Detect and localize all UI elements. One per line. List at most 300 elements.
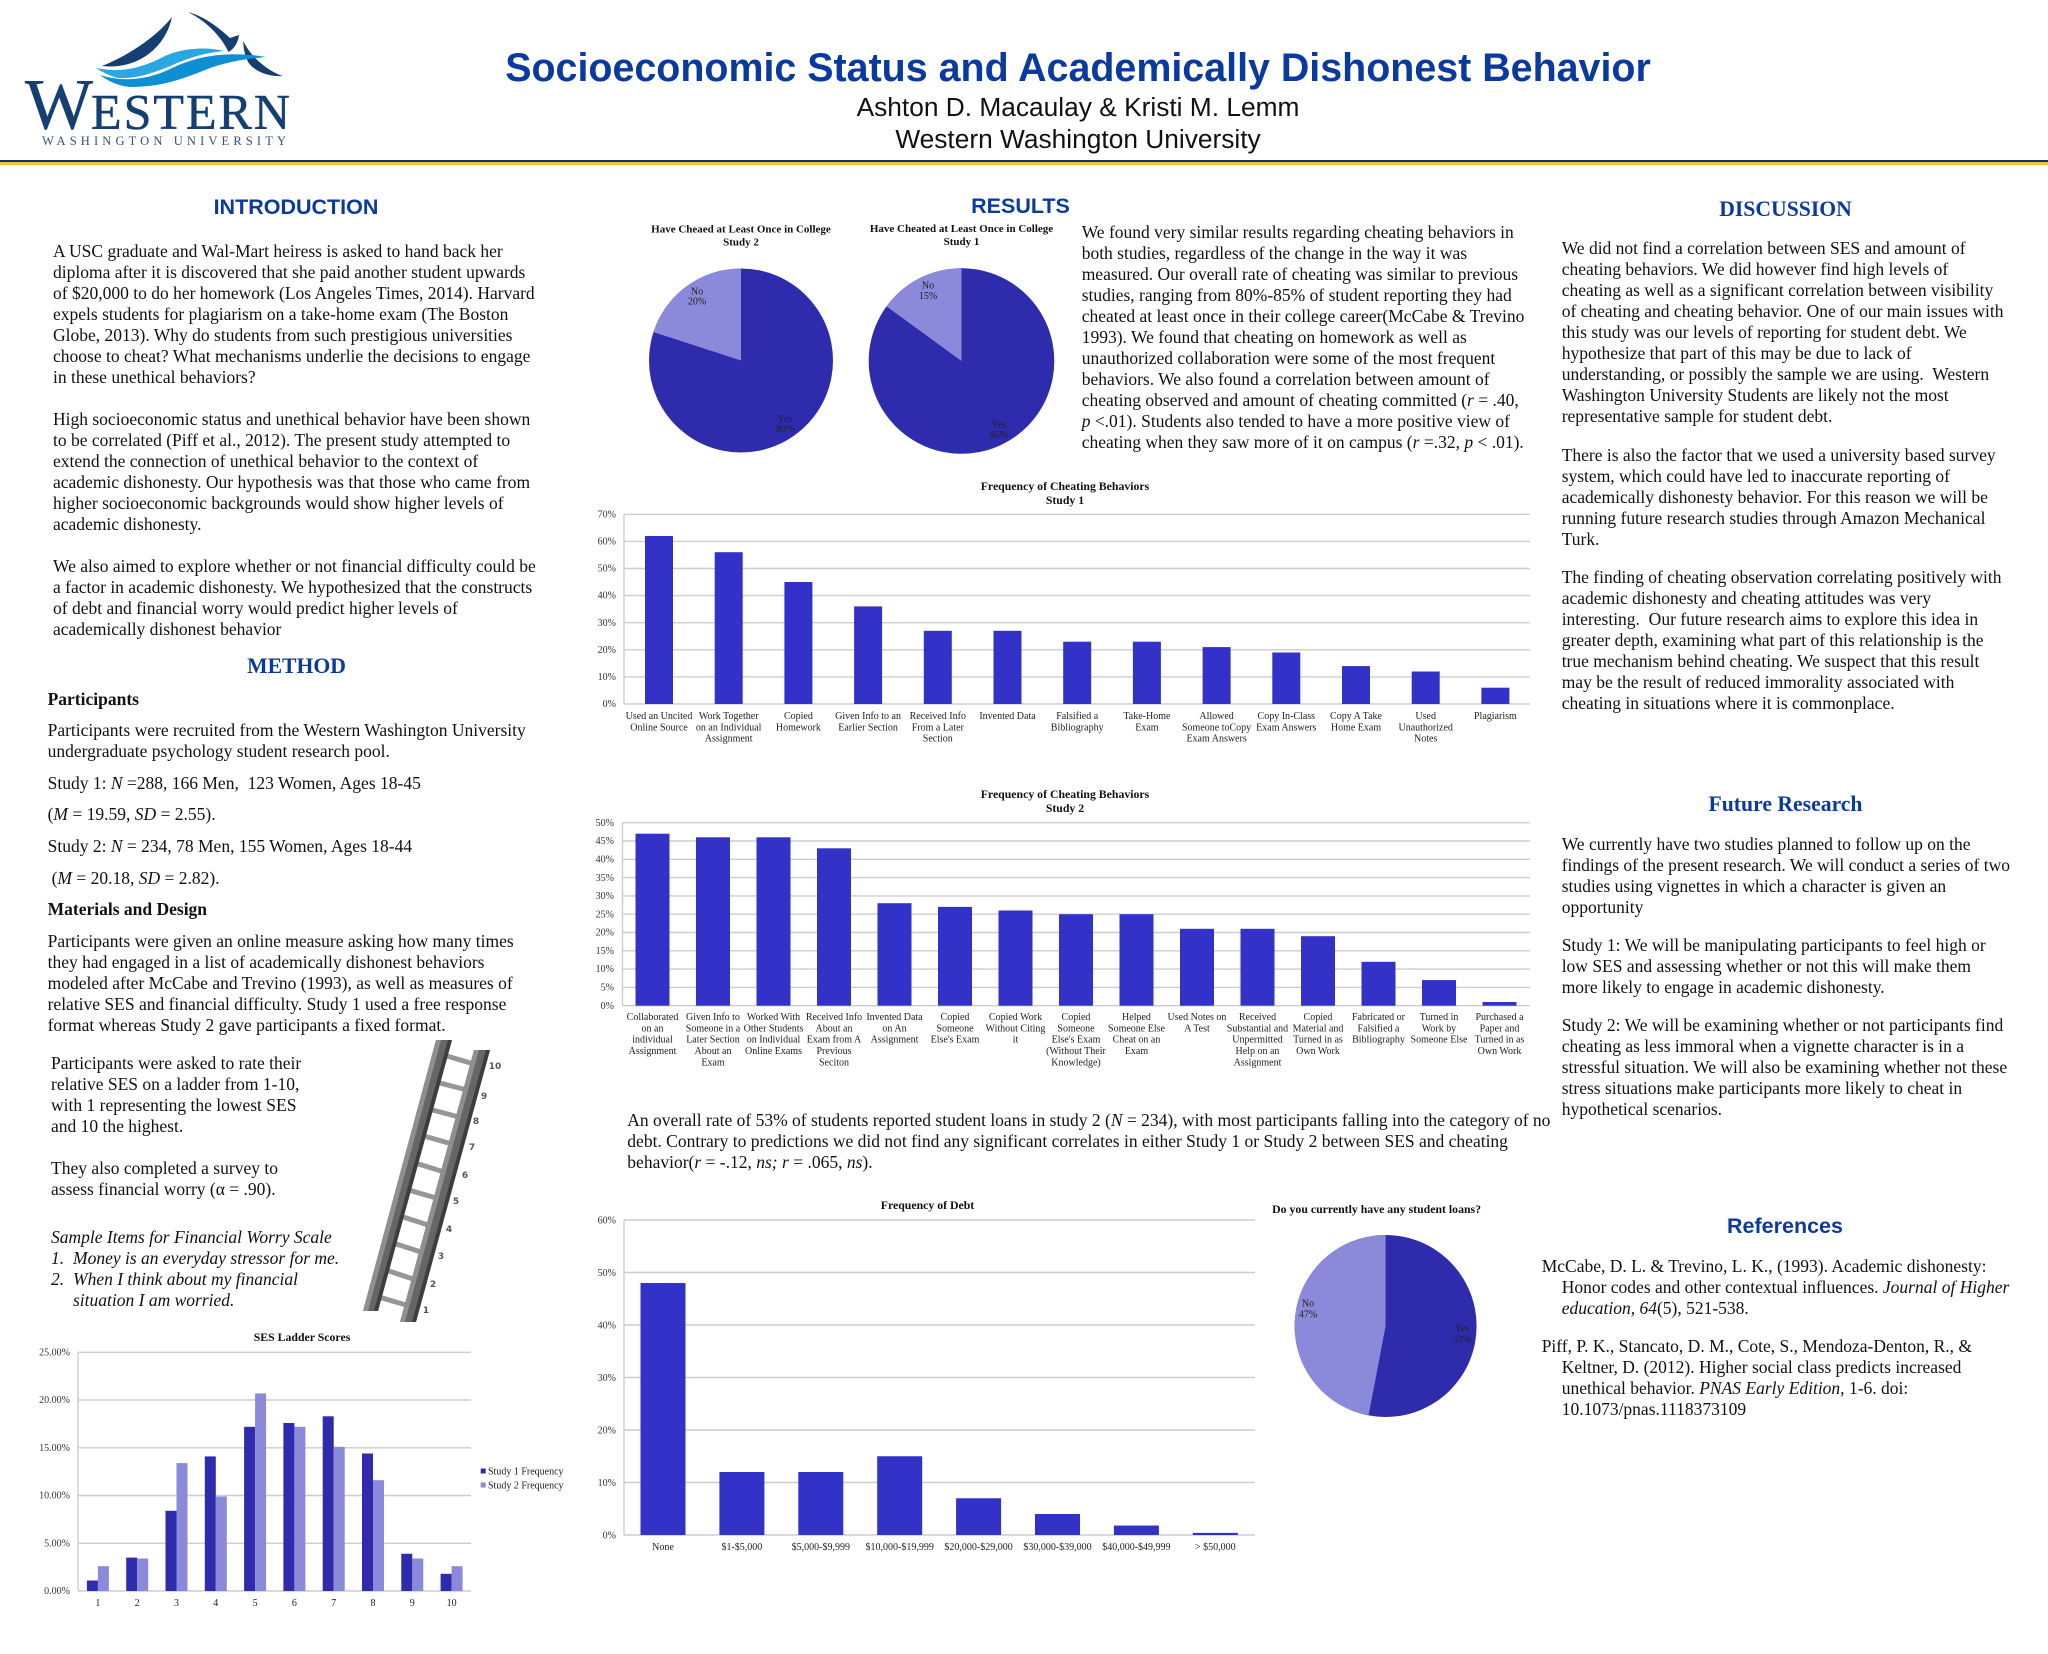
text: results summary: 1993). We found that cheating on homework as well as <box>1082 327 1467 347</box>
category labels: Someone in a <box>686 1023 741 1034</box>
text: future study 2: cheating as less immoral when a vignette character is in a <box>1562 1036 1964 1056</box>
text: introduction paragraph 1: in these unethical behaviors? <box>53 367 256 387</box>
chart title: Study 2 <box>1046 801 1084 815</box>
category labels: Work by <box>1422 1023 1456 1034</box>
pie slices <box>649 268 833 452</box>
ladder numbers: 6 <box>462 1171 468 1181</box>
text: introduction paragraph 3: a factor in academic dishonesty. We hypothesized that the constructs <box>53 577 532 597</box>
text: results summary: cheating when they saw more of it on campus (r =.32, p < .01). <box>1082 432 1524 452</box>
text: sample items: When I think about my financial <box>73 1269 298 1289</box>
category labels: A Test <box>1184 1023 1210 1034</box>
x axis labels: 10 <box>447 1598 457 1609</box>
text: discussion paragraph 1: understanding, or possibly the sample we are using. Western <box>1562 364 1989 384</box>
text: study 1 statistics: (M = 19.59, SD = 2.55). <box>48 804 216 824</box>
text: results summary: cheating observed and amount of cheating committed (r = .40, <box>1082 390 1519 410</box>
category labels: Collaborated <box>627 1012 678 1023</box>
y axis labels: 60% <box>598 1216 616 1226</box>
category labels: Earlier Section <box>838 722 898 733</box>
gridlines <box>622 823 1530 1006</box>
category labels: Falsified a <box>1056 711 1099 722</box>
category labels: Homework <box>776 722 821 733</box>
y axis labels: 30% <box>598 1373 616 1384</box>
logo mark: dark sails <box>102 12 282 76</box>
category labels: Material and <box>1293 1023 1343 1034</box>
category labels: Else's Exam <box>1052 1035 1101 1046</box>
category labels: Unauthorized <box>1398 722 1453 733</box>
pie labels: Yes <box>778 414 792 425</box>
text: results summary <box>1080 222 1524 452</box>
pie labels: Yes <box>1455 1324 1469 1334</box>
pie title: Study 1 <box>944 236 979 248</box>
text: ladder instructions: Participants were asked to rate their <box>51 1053 301 1073</box>
category labels <box>626 711 1517 745</box>
text: discussion paragraph 3: academic dishonesty and cheating attitudes was very <box>1562 588 1931 608</box>
category labels: Work Together <box>699 711 759 722</box>
text: discussion paragraph 3: may be the result of reduced immorality associated with <box>1562 672 1954 692</box>
text: reference Piff: unethical behavior. PNAS Early Edition, 1-6. doi: <box>1562 1378 1908 1398</box>
pie title: Have Cheated at Least Once in College <box>870 223 1053 235</box>
category labels: Own Work <box>1296 1046 1340 1057</box>
text: sample items: Money is an everyday stressor for me. <box>73 1248 339 1268</box>
category labels: Notes <box>1414 734 1437 745</box>
category labels: Used an Uncited <box>626 711 692 722</box>
chart title: Study 1 <box>1046 493 1084 507</box>
text: introduction paragraph 1 <box>53 241 535 387</box>
category labels: Used Notes on <box>1168 1012 1226 1023</box>
pie labels <box>1299 1298 1471 1346</box>
text: introduction paragraph 2: academic dishonesty. Our hypothesis was that those who came from <box>53 472 530 492</box>
text: discussion paragraph 2: system, which could have led to inaccurate reporting of <box>1562 466 1950 486</box>
category labels: Someone Else <box>1108 1023 1166 1034</box>
text: sample items <box>51 1227 339 1310</box>
y axis labels: 10% <box>598 1478 616 1489</box>
text: study 2 statistics: (M = 20.18, SD = 2.82). <box>52 868 220 888</box>
ladder numbers: 9 <box>481 1092 487 1102</box>
subheading: materials and design: Materials and Design <box>48 899 207 919</box>
text: discussion paragraph 3: interesting. Our future research aims to explore this idea in <box>1562 609 1978 629</box>
panel: results <box>596 194 1550 1553</box>
text: ladder instructions: and 10 the highest. <box>51 1116 183 1136</box>
heading: introduction: INTRODUCTION <box>214 194 378 218</box>
x axis labels: 6 <box>292 1598 297 1609</box>
text: ladder instructions: with 1 representing the lowest SES <box>51 1095 296 1115</box>
category labels: Copy In-Class <box>1258 711 1315 722</box>
text: discussion paragraph 1: hypothesize that part of this may be due to lack of <box>1562 343 1912 363</box>
category labels: Seciton <box>819 1057 849 1068</box>
category labels: Received <box>1239 1012 1276 1023</box>
category labels: $1-$5,000 <box>721 1542 762 1553</box>
text: materials description: they had engaged in a list of academically dishonest behaviors <box>48 952 484 972</box>
text: introduction paragraph 2: High socioeconomic status and unethical behavior have been shown <box>53 409 530 429</box>
y axis labels: 50% <box>598 1268 616 1279</box>
text: introduction paragraph 2: extend the connection of unethical behavior to the context of <box>53 451 478 471</box>
category labels: Turned in <box>1420 1012 1458 1023</box>
text: introduction paragraph 1: Globe, 2013). Why do students from such prestigious universities <box>53 325 512 345</box>
gridlines <box>78 1352 471 1591</box>
text: materials description <box>48 931 514 1035</box>
legend <box>481 1466 564 1492</box>
category labels: $20,000-$29,000 <box>944 1542 1013 1553</box>
category labels: Exam Answers <box>1186 734 1247 745</box>
category labels: Assignment <box>1234 1057 1282 1068</box>
text: participants description: Participants were recruited from the Western Washington University <box>48 720 526 740</box>
category labels: $10,000-$19,999 <box>866 1542 934 1553</box>
text: discussion paragraph 3 <box>1562 567 2002 713</box>
category labels <box>652 1542 1236 1553</box>
text: reference Piff <box>1542 1336 1972 1419</box>
category labels: it <box>1013 1035 1018 1046</box>
category labels: Exam from A <box>807 1035 862 1046</box>
pie labels: 47% <box>1299 1310 1317 1320</box>
heading: results: RESULTS <box>971 194 1070 218</box>
category labels: Invented Data <box>866 1012 923 1023</box>
y axis labels: 15.00% <box>39 1443 70 1454</box>
text: ladder instructions <box>51 1053 302 1136</box>
y axis labels: 40% <box>598 1320 616 1332</box>
category labels: Bibliography <box>1051 722 1104 733</box>
text: sample items: situation I am worried. <box>73 1290 234 1310</box>
pie slices <box>1295 1235 1477 1417</box>
text: results summary: unauthorized collaboration were some of the most frequent <box>1082 348 1495 368</box>
text: future research overview: opportunity <box>1562 897 1643 917</box>
category labels: Received Info <box>910 711 966 722</box>
text: introduction paragraph 1: of $20,000 to do her homework (Los Angeles Times, 2014). Harvard <box>53 283 535 303</box>
category labels: (Without Their <box>1046 1046 1107 1057</box>
text: discussion paragraph 2: running future research studies through Amazon Mechanical <box>1562 508 1985 528</box>
category labels: Copied <box>784 711 813 722</box>
text: future study 2: stressful situation. We will also be examining whether not these <box>1562 1057 2007 1077</box>
text: introduction paragraph 1: expels students for plagiarism on a take-home exam (The Boston <box>53 304 508 324</box>
text: results summary: studies, ranging from 80%-85% of student reporting they had <box>1082 285 1512 305</box>
y axis labels: 45% <box>596 836 614 847</box>
category labels: Other Students <box>744 1023 803 1034</box>
logo wordmark <box>25 64 290 148</box>
category labels: Worked With <box>747 1012 800 1023</box>
bars <box>640 1283 1238 1535</box>
text: future study 2: Study 2: We will be examining whether or not participants find <box>1562 1015 2003 1035</box>
y axis labels: 5.00% <box>44 1538 70 1550</box>
category labels: Exam Answers <box>1256 722 1317 733</box>
gridlines <box>624 1220 1255 1535</box>
text: introduction paragraph 2: to be correlated (Piff et al., 2012). The present study attempted to <box>53 430 510 450</box>
pie title: Study 2 <box>723 236 759 248</box>
category labels: Without Citing <box>986 1023 1045 1034</box>
pie labels: 15% <box>919 291 937 302</box>
text: financial worry survey: assess financial worry (α = .90). <box>51 1179 276 1199</box>
text: introduction paragraph 3: We also aimed to explore whether or not financial difficulty could be <box>53 556 536 576</box>
pie labels: 85% <box>990 430 1008 441</box>
y axis labels: 30% <box>596 891 614 902</box>
x axis labels: 4 <box>213 1598 218 1609</box>
category labels: Exam <box>1125 1046 1148 1057</box>
panel: method <box>48 654 526 1035</box>
text: reference McCabe: McCabe, D. L. & Trevino, L. K., (1993). Academic dishonesty: <box>1542 1256 1986 1276</box>
category labels: Received Info <box>806 1012 862 1023</box>
category labels: Copied <box>1062 1012 1090 1023</box>
category labels: Cheat on an <box>1113 1035 1160 1046</box>
text: sample items: 2. <box>51 1269 64 1289</box>
text: discussion paragraph 1: of cheating and cheating behavior. One of our main issues with <box>1562 301 2003 321</box>
pie labels: No <box>691 286 703 298</box>
chart: pie study 1 <box>868 223 1054 454</box>
text: future research overview <box>1562 834 2010 917</box>
subheading: participants: Participants <box>48 689 139 709</box>
category labels: Later Section <box>686 1035 740 1046</box>
pie labels: 53% <box>1453 1334 1471 1346</box>
panel: ladder text <box>51 1053 339 1310</box>
text: reference Piff: Keltner, D. (2012). Higher social class predicts increased <box>1562 1357 1961 1377</box>
category labels: Copied <box>941 1012 969 1023</box>
ladder numbers <box>423 1062 501 1316</box>
pie labels: No <box>922 280 934 292</box>
text: discussion paragraph 2: academically dishonesty behavior. For this reason we will be <box>1562 487 1988 507</box>
bars <box>645 536 1509 704</box>
text: discussion paragraph 1: this study was our levels of reporting for student debt. We <box>1562 322 1967 342</box>
ladder numbers: 5 <box>453 1197 459 1207</box>
category labels <box>627 1012 1524 1068</box>
text: participants description: undergraduate psychology student research pool. <box>48 741 390 761</box>
chart title: Frequency of Debt <box>881 1198 974 1212</box>
y axis labels <box>596 818 614 1012</box>
ladder numbers: 10 <box>489 1062 501 1072</box>
chart: frequency of debt <box>598 1198 1255 1553</box>
category labels: None <box>652 1542 674 1553</box>
text: discussion paragraph 1: We did not find a correlation between SES and amount of <box>1562 238 1966 258</box>
text: discussion paragraph 2: Turk. <box>1562 529 1599 549</box>
y axis labels: 20% <box>598 645 616 656</box>
text: introduction paragraph 2 <box>53 409 530 534</box>
chart: pie study 2 <box>649 224 833 452</box>
text: discussion paragraph 3: greater depth, examining what part of this relationship is the <box>1562 630 1984 650</box>
header rule <box>0 160 2048 164</box>
text: future study 1: low SES and assessing whether or not this will make them <box>1562 956 1971 976</box>
ladder rails <box>363 1040 490 1322</box>
category labels: > $50,000 <box>1195 1542 1236 1553</box>
legend: Study 2 Frequency <box>488 1480 564 1492</box>
y axis labels: 25% <box>596 910 614 920</box>
category labels: About an <box>816 1023 852 1034</box>
category labels: Given Info to <box>686 1012 740 1023</box>
text: results summary: measured. Our overall rate of cheating was similar to previous <box>1082 264 1518 284</box>
logo wordmark: WASHINGTON UNIVERSITY <box>42 134 286 148</box>
text: introduction paragraph 2: higher socioeconomic backgrounds would show higher levels of <box>53 493 504 513</box>
pie labels <box>688 286 794 435</box>
category labels: Helped <box>1122 1012 1151 1023</box>
text: discussion paragraph 2 <box>1562 445 1996 549</box>
category labels: Plagiarism <box>1474 711 1517 722</box>
ladder rungs <box>372 1054 474 1305</box>
text: student loans summary: behavior(r = -.12, ns; r = .065, ns). <box>627 1152 873 1172</box>
category labels: Own Work <box>1478 1046 1521 1057</box>
text: materials description: relative SES and financial difficulty. Study 1 used a free response <box>48 994 506 1014</box>
y axis labels: 20% <box>596 928 614 938</box>
text: discussion paragraph 1 <box>1562 238 2004 426</box>
chart title <box>981 479 1150 507</box>
category labels: Given Info to an <box>835 711 901 722</box>
logo mark: blue waves <box>96 49 266 87</box>
category labels: individual <box>632 1035 673 1046</box>
chart: frequency of cheating behaviors study 1 <box>598 479 1530 745</box>
text: future study 2: stress situations make participants more likely to cheat in <box>1562 1078 1962 1098</box>
chart title: SES Ladder Scores <box>254 1330 351 1344</box>
ladder numbers: 4 <box>446 1225 452 1235</box>
y axis labels: 20.00% <box>39 1395 70 1406</box>
y axis labels <box>39 1348 70 1597</box>
text: ladder instructions: relative SES on a ladder from 1-10, <box>51 1074 299 1094</box>
text: discussion paragraph 3: cheating in situations where it is commonplace. <box>1562 693 1895 713</box>
category labels: on an Individual <box>696 722 762 733</box>
y axis labels: 10% <box>598 672 616 683</box>
x axis labels: 1 <box>95 1598 100 1609</box>
category labels: $40,000-$49,999 <box>1102 1542 1171 1553</box>
heading: discussion: DISCUSSION <box>1719 196 1852 220</box>
pie labels: No <box>1302 1298 1314 1310</box>
y axis labels: 0% <box>603 699 616 710</box>
category labels: Turned in as <box>1293 1035 1343 1046</box>
text: discussion paragraph 1: Washington University Students are likely not the most <box>1562 385 1949 405</box>
category labels: From a Later <box>912 722 965 733</box>
x axis labels: 2 <box>135 1598 140 1609</box>
y axis labels: 40% <box>596 854 614 866</box>
category labels: on Individual <box>747 1035 801 1046</box>
text: introduction paragraph 3: academically dishonest behavior <box>53 619 281 639</box>
x axis labels: 3 <box>174 1598 179 1609</box>
category labels: Assignment <box>629 1046 677 1057</box>
logo wordmark: ESTERN <box>91 83 290 139</box>
category labels: Purchased a <box>1475 1012 1524 1023</box>
pie title: Do you currently have any student loans? <box>1272 1202 1481 1216</box>
category labels: Online Exams <box>745 1046 802 1057</box>
pie labels: Yes <box>991 420 1006 430</box>
ladder numbers: 3 <box>438 1252 444 1262</box>
text: reference McCabe <box>1542 1256 2010 1318</box>
category labels: Used <box>1415 711 1436 722</box>
category labels: Substantial and <box>1227 1023 1288 1034</box>
x axis labels: 8 <box>370 1598 376 1609</box>
category labels: Copied Work <box>989 1012 1042 1023</box>
category labels: Unpermitted <box>1232 1035 1283 1046</box>
text: student loans summary: debt. Contrary to predictions we did not find any significant correlates in either Study 1 or Study 2 between SES and cheating <box>627 1131 1508 1151</box>
category labels: Take-Home <box>1123 711 1171 722</box>
authors: Ashton D. Macaulay & Kristi M. Lemm <box>857 92 1299 122</box>
y axis labels: 5% <box>601 982 614 994</box>
text: discussion paragraph 1: representative sample for student debt. <box>1562 406 1832 426</box>
bars <box>636 834 1516 1006</box>
category labels: Else's Exam <box>931 1035 980 1046</box>
category labels: Section <box>923 734 953 745</box>
text: sample items: 1. <box>51 1248 64 1268</box>
logo wordmark: W <box>25 64 93 144</box>
category labels: Online Source <box>630 722 688 733</box>
category labels: Turned in as <box>1475 1035 1524 1046</box>
category labels: Home Exam <box>1331 722 1381 733</box>
text: future study 1 <box>1562 935 1986 997</box>
gridlines <box>624 514 1530 704</box>
text: discussion paragraph 3: The finding of cheating observation correlating positively with <box>1562 567 2002 587</box>
text: introduction paragraph 1: A USC graduate and Wal-Mart heiress is asked to hand back her <box>53 241 503 261</box>
text: results summary: both studies, regardless of the change in the way it was <box>1082 243 1467 263</box>
text: study 2 sample: Study 2: N = 234, 78 Men, 155 Women, Ages 18-44 <box>48 836 412 856</box>
text: future research overview: We currently have two studies planned to follow up on the <box>1562 834 1970 854</box>
affiliation: Western Washington University <box>895 124 1261 154</box>
pie labels <box>919 280 1008 441</box>
category labels: Invented Data <box>979 711 1036 722</box>
text: results summary: behaviors. We also found a correlation between amount of <box>1082 369 1490 389</box>
category labels: About an <box>695 1046 731 1057</box>
x axis labels: 9 <box>410 1598 415 1609</box>
text: discussion paragraph 2: There is also the factor that we used a university based survey <box>1562 445 1996 465</box>
text: future study 2: hypothetical scenarios. <box>1562 1099 1722 1119</box>
y axis labels: 40% <box>598 590 616 602</box>
ladder numbers: 8 <box>473 1117 479 1127</box>
y axis labels: 0% <box>601 1001 614 1012</box>
text: future study 1: Study 1: We will be manipulating participants to feel high or <box>1562 935 1986 955</box>
y axis labels: 0% <box>603 1530 616 1542</box>
text: future research overview: findings of the present research. We will conduct a series of two <box>1562 855 2010 875</box>
text: future research overview: studies using vignettes in which a character is given an <box>1562 876 1946 896</box>
text: discussion paragraph 3: true mechanism behind cheating. We suspect that this result <box>1562 651 1979 671</box>
category labels: Copy A Take <box>1330 711 1383 722</box>
category labels: Someone Else <box>1411 1035 1468 1046</box>
category labels: Assignment <box>871 1035 919 1046</box>
y axis labels <box>598 1216 616 1542</box>
category labels: Copied <box>1304 1012 1332 1023</box>
text: results summary: cheated at least once in their college career(McCabe & Trevino <box>1082 306 1524 326</box>
heading: method: METHOD <box>247 654 346 678</box>
category labels: Previous <box>816 1046 852 1057</box>
category labels: Someone <box>1057 1023 1095 1034</box>
category labels: Exam <box>1135 722 1159 733</box>
bars: study 2 <box>98 1393 463 1591</box>
category labels: on an <box>642 1023 663 1034</box>
y axis labels: 30% <box>598 618 616 629</box>
text: materials description: Participants were given an online measure asking how many times <box>48 931 514 951</box>
text: future study 2 <box>1562 1015 2007 1119</box>
y axis labels: 50% <box>596 818 614 829</box>
category labels: Paper and <box>1480 1023 1519 1034</box>
y axis labels: 50% <box>598 564 616 574</box>
chart: SES ladder scores <box>39 1330 564 1609</box>
text: financial worry survey: They also completed a survey to <box>51 1158 278 1178</box>
category labels: Fabricated or <box>1352 1012 1406 1023</box>
y axis labels: 10.00% <box>39 1490 70 1502</box>
category labels: Bibliography <box>1352 1035 1405 1046</box>
text: introduction paragraph 3 <box>53 556 536 639</box>
category labels: $5,000-$9,999 <box>792 1542 850 1553</box>
ladder numbers: 1 <box>423 1306 429 1316</box>
text: sample items: Sample Items for Financial Worry Scale <box>51 1227 332 1247</box>
title: Socioeconomic Status and Academically Dishonest Behavior <box>505 46 1651 90</box>
category labels: Someone toCopy <box>1182 722 1251 733</box>
y axis labels: 20% <box>598 1426 616 1436</box>
text: reference Piff: Piff, P. K., Stancato, D. M., Cote, S., Mendoza-Denton, R., & <box>1542 1336 1972 1356</box>
category labels: Exam <box>701 1057 725 1068</box>
category labels: Knowledge) <box>1051 1057 1101 1068</box>
text: student loans summary <box>627 1110 1550 1172</box>
category labels: Allowed <box>1199 711 1234 722</box>
text: introduction paragraph 3: of debt and financial worry would predict higher levels of <box>53 598 458 618</box>
category labels: on An <box>882 1023 907 1034</box>
chart title: Frequency of Cheating Behaviors <box>981 787 1150 801</box>
heading: references: References <box>1727 1214 1843 1238</box>
heading: future research: Future Research <box>1708 792 1862 816</box>
icon: SES ladder <box>363 1040 501 1322</box>
text: student loans summary: An overall rate of 53% of students reported student loans in study 2 (N = 234), with most participants falling into the category of no <box>627 1110 1550 1130</box>
y axis labels: 60% <box>598 536 616 548</box>
category labels: Assignment <box>705 734 753 745</box>
pie labels: 20% <box>688 296 706 308</box>
panel: future research <box>1562 792 2010 1119</box>
